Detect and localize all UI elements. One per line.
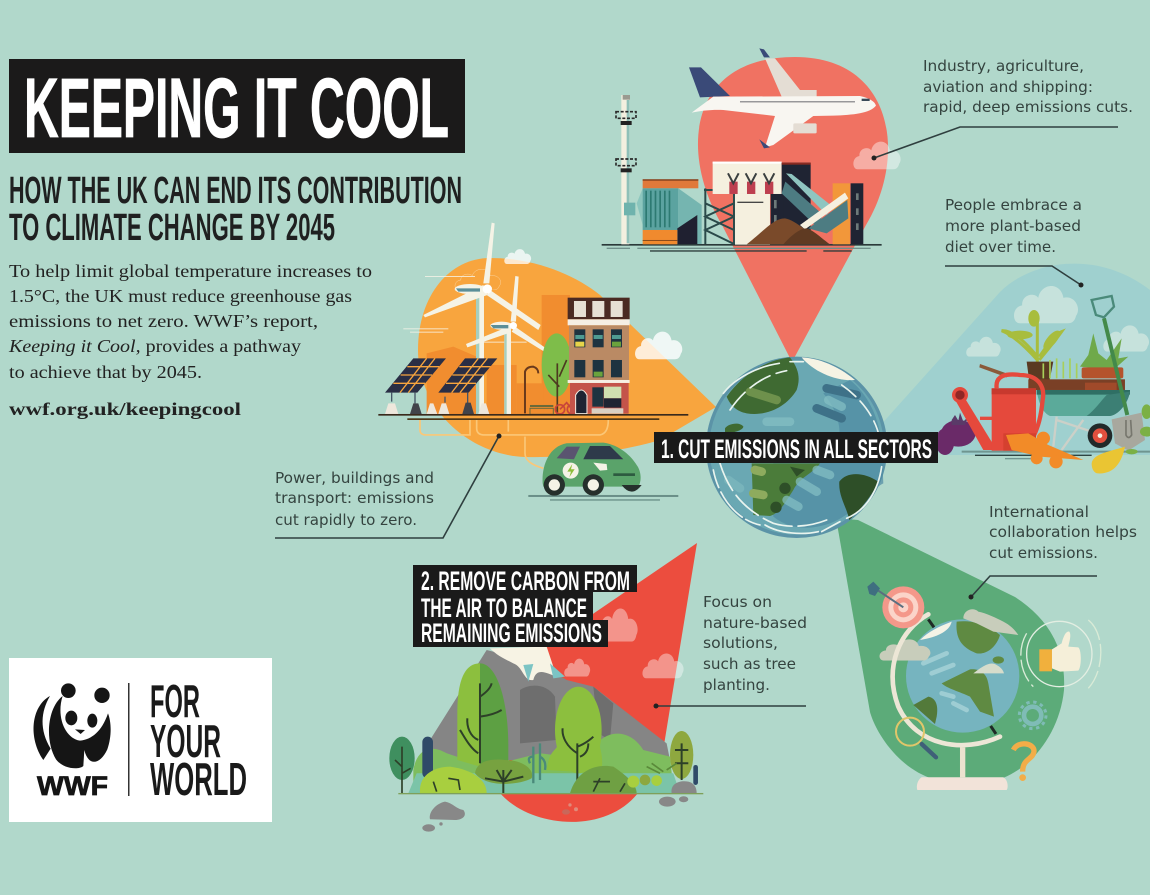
illustration: wind turbines, solar panels, house and electric car [378, 223, 688, 501]
label: remove carbon from the air: 2. REMOVE CARBON FROM [421, 566, 630, 596]
intro text: to achieve that by 2045. [9, 362, 202, 382]
callout: plant-based diet: People embrace a [945, 196, 1082, 214]
callout: plant-based diet: diet over time. [945, 238, 1056, 256]
subtitle [9, 170, 462, 249]
title banner [9, 59, 465, 155]
callout: industry [872, 57, 1133, 160]
callout: international collaboration: cut emissions. [989, 544, 1098, 562]
panel: carbon removal spotlight [500, 543, 697, 822]
intro text: Keeping it Cool, provides a pathway [8, 336, 301, 356]
WWF logo panel: WORLD [150, 753, 247, 805]
icon: question mark [1013, 744, 1034, 781]
icon: thumbs up [1021, 620, 1101, 688]
WWF logo panel: WWF [37, 771, 108, 801]
callout: plant-based diet [945, 196, 1084, 288]
callout: power, buildings and transport: cut rapidly to zero. [275, 511, 417, 529]
label: remove carbon from the air [413, 565, 637, 648]
icon: solar panels [385, 358, 497, 414]
panel: industry spotlight [698, 57, 888, 362]
title banner: KEEPING IT COOL [24, 61, 449, 155]
icon: airplane [689, 48, 876, 148]
intro text: 1.5°C, the UK must reduce greenhouse gas [9, 286, 352, 306]
intro text: To help limit global temperature increases to [9, 261, 372, 281]
panel: international collaboration spotlight [836, 518, 1064, 778]
illustration: international collaboration globe [867, 582, 1101, 790]
icon: beetroot [936, 413, 976, 455]
callout: industry: Industry, agriculture, [923, 57, 1084, 75]
callout: nature-based solutions: solutions, [703, 634, 778, 652]
WWF logo panel [9, 658, 272, 822]
callout: power, buildings and transport: Power, buildings and [275, 469, 434, 487]
label: remove carbon from the air: THE AIR TO BALANCE [421, 593, 587, 623]
icon: townhouse [568, 298, 630, 414]
subtitle: TO CLIMATE CHANGE BY 2045 [9, 207, 335, 249]
callout: industry: rapid, deep emissions cuts. [923, 98, 1133, 116]
website link: wwf.org.uk/keepingcool [9, 399, 241, 419]
label: cut emissions in all sectors [654, 432, 938, 464]
intro text [8, 261, 372, 382]
WWF logo panel: YOUR [150, 715, 221, 767]
label: remove carbon from the air: REMAINING EMISSIONS [421, 618, 602, 648]
illustration: industry, aviation, power plant [602, 48, 901, 252]
icon: gear [1019, 702, 1046, 729]
icon: magnifying glass [896, 718, 936, 757]
WWF logo panel: FOR [150, 675, 200, 727]
icon: panda [34, 683, 111, 768]
callout: international collaboration: collaboration helps [989, 523, 1137, 541]
callout: international collaboration [968, 503, 1137, 600]
callout: power, buildings and transport: transport: emissions [275, 489, 434, 507]
subtitle: HOW THE UK CAN END ITS CONTRIBUTION [9, 170, 462, 212]
icon: target with arrow [867, 582, 924, 628]
illustration: mountain forest [389, 608, 703, 832]
callout: nature-based solutions: nature-based [703, 614, 807, 632]
icon: electric car [528, 443, 678, 501]
panel: plant-based diet spotlight [878, 264, 1150, 455]
callout: plant-based diet: more plant-based [945, 217, 1081, 235]
illustration: garden tools and vegetables [936, 286, 1150, 473]
intro text: emissions to net zero. WWF’s report, [9, 311, 318, 331]
globe: central Earth [706, 357, 887, 538]
panel: power, buildings and transport spotlight [418, 258, 716, 457]
callout: nature-based solutions: planting. [703, 676, 770, 694]
callout: industry: aviation and shipping: [923, 78, 1093, 96]
icon: carrots and pear [1006, 432, 1125, 473]
callout: nature-based solutions: such as tree [703, 655, 796, 673]
icon: watering can [952, 374, 1043, 451]
callout: international collaboration: International [989, 503, 1089, 521]
callout: power, buildings and transport [275, 434, 502, 538]
callout: nature-based solutions [654, 593, 807, 708]
callout: nature-based solutions: Focus on [703, 593, 772, 611]
label: cut emissions in all sectors: 1. CUT EMISSIONS IN ALL SECTORS [661, 434, 932, 464]
